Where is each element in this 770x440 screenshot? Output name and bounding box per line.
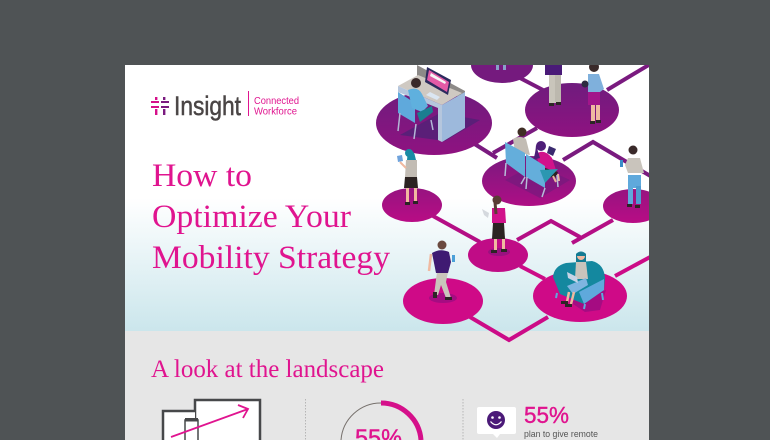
- connecting lines: [433, 63, 652, 340]
- people on chairs: [505, 128, 570, 198]
- node: desk: [376, 91, 492, 155]
- logo descriptor: Workforce: [254, 106, 297, 118]
- node: center: [468, 238, 528, 272]
- node: bottom right: [533, 270, 627, 322]
- divider left: [304, 399, 306, 440]
- icon: smiley speech bubble: [477, 407, 516, 438]
- title: Optimize Your: [152, 199, 351, 235]
- title: [152, 158, 390, 276]
- node: top right: [525, 83, 619, 137]
- person: man with phone right: [620, 146, 644, 208]
- person: woman in armchair: [553, 252, 606, 312]
- node: top middle: [471, 65, 533, 83]
- title: How to: [152, 158, 252, 194]
- heading: A look at the landscape: A look at the landscape: [151, 356, 384, 383]
- node: bottom left: [403, 278, 483, 324]
- person: woman top: [582, 62, 604, 124]
- panel: landscape section: [125, 331, 649, 440]
- person: woman with tablet center: [482, 196, 510, 256]
- logo wordmark: Insight: [174, 91, 241, 121]
- stat: 55% plan to give remote: [524, 402, 598, 440]
- person: woman with phone: [397, 149, 418, 205]
- icon: devices with growth arrow: [163, 400, 260, 440]
- node: right small: [603, 189, 649, 223]
- logo descriptor: Connected: [254, 96, 299, 107]
- stat: 55% plan to give remote: plan to give remote: [524, 429, 598, 440]
- person: top middle legs: [496, 65, 506, 70]
- logo descriptor: [254, 96, 299, 118]
- logo: Insight Connected Workforce: [151, 91, 299, 121]
- node: left small: [382, 188, 442, 222]
- person at desk: [398, 65, 480, 142]
- stat: 55% plan to give remote: 55%: [524, 402, 569, 428]
- network illustration: [376, 47, 663, 340]
- title: Mobility Strategy: [152, 240, 390, 276]
- person: man top: [545, 65, 562, 106]
- donut chart: 55%: [341, 403, 421, 440]
- node: middle chairs: [482, 156, 576, 206]
- icon: Insight mark: [151, 97, 169, 115]
- person: walking man: [429, 240, 457, 303]
- divider right: [462, 399, 464, 440]
- page background panel: [125, 65, 649, 331]
